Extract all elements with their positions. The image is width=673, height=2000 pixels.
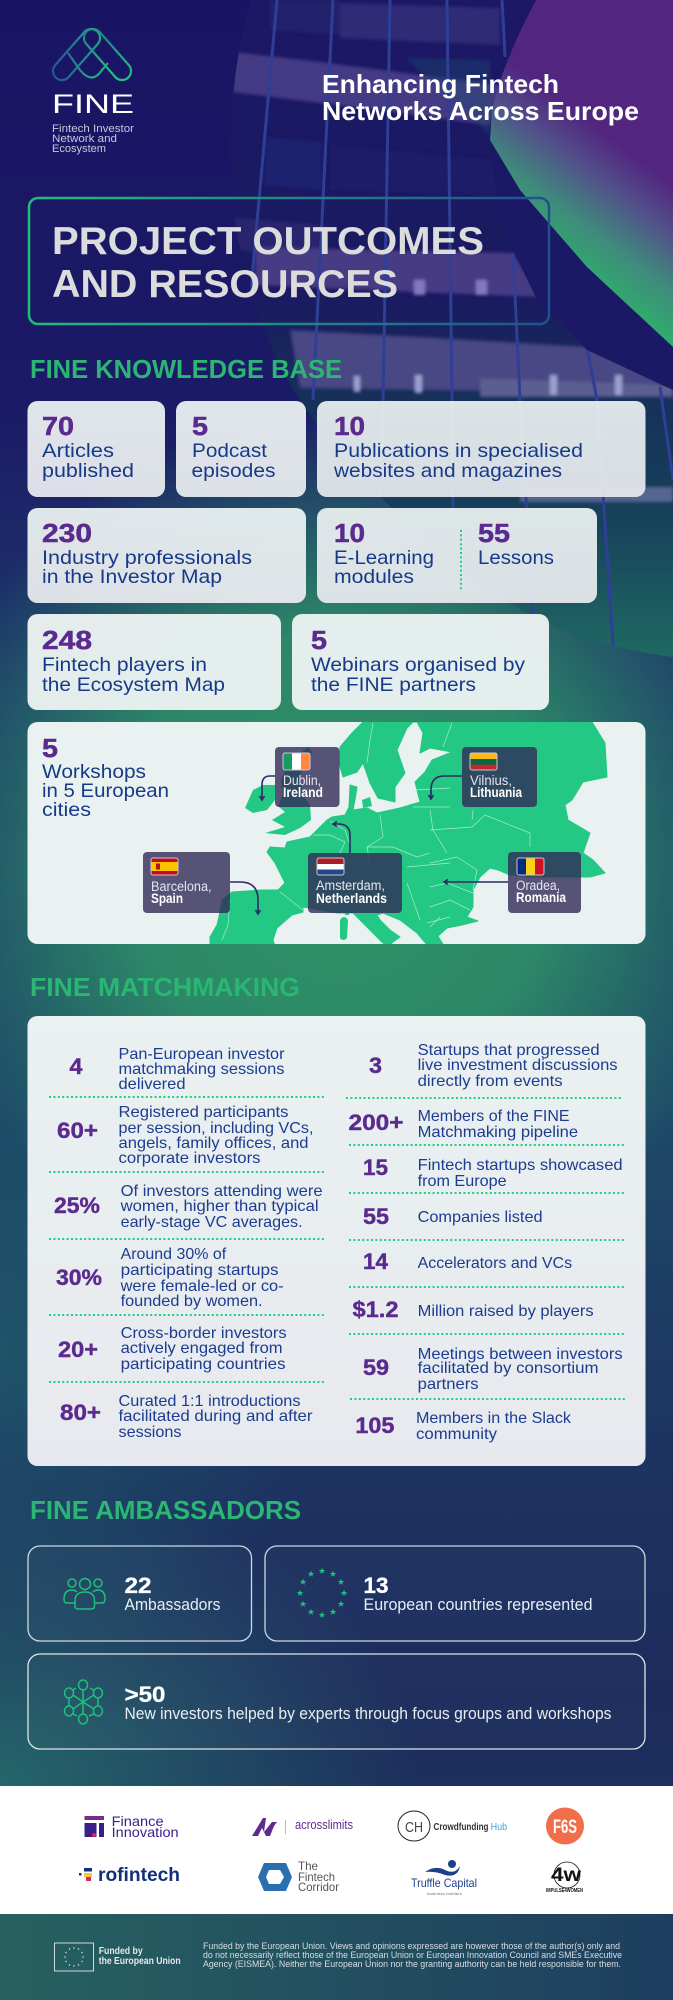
card: articles: [28, 401, 165, 497]
disclaimer: Funded by the European Union. Views and opinions expressed are however those of the author(s) only and: [203, 1941, 620, 1952]
stat: 80+ introductions: 80+: [60, 1400, 101, 1425]
workshops text: in 5 European: [42, 780, 169, 802]
map of Europe: [210, 722, 607, 946]
stat: 25% women: Of investors attending were: [121, 1183, 323, 1200]
workshops text: Workshops: [42, 761, 146, 783]
workshops text: 5: [42, 733, 58, 763]
logo tagline: [52, 123, 134, 155]
stat: 4 sessions: matchmaking sessions: [118, 1061, 285, 1078]
card: investor map: [28, 508, 306, 603]
panel: matchmaking: [28, 1016, 646, 1466]
stat: 3 startups: [369, 1042, 618, 1090]
callout: Dublin, Ireland: Dublin,: [283, 773, 321, 788]
panel: partner logos: [0, 1786, 673, 1914]
card: e-learning: modules: [334, 566, 414, 588]
card: ecosystem map: the Ecosystem Map: [42, 674, 225, 696]
stat: 59 meetings: Meetings between investors: [418, 1346, 623, 1363]
callout: Oradea, Romania: [508, 852, 581, 913]
card: investor map: Industry professionals: [42, 547, 252, 569]
card: e-learning: E-Learning: [334, 547, 434, 569]
card: 13 countries: European countries represented: [364, 1596, 592, 1614]
stat: 4 sessions: delivered: [118, 1076, 186, 1093]
card: webinars: Webinars organised by: [311, 654, 525, 676]
icon: people: [64, 1578, 105, 1609]
stat: 25% women: 25%: [54, 1193, 100, 1218]
logo: rofintech: rofintech: [98, 1865, 180, 1886]
stat: $1.2 million: [352, 1297, 594, 1322]
card: articles: Articles: [42, 440, 114, 462]
card: e-learning: 10: [334, 518, 365, 548]
stat: 3 startups: 3: [369, 1053, 382, 1078]
stat: 80+ introductions: facilitated during and after: [118, 1408, 312, 1425]
card: >50 investors: >50: [124, 1682, 166, 1707]
card: 22 ambassadors: 22: [124, 1573, 152, 1598]
arrow: Vilnius: [428, 776, 462, 799]
stat: 105 slack: [355, 1410, 571, 1443]
stat: 30% startups: 30%: [56, 1265, 102, 1290]
callout: Vilnius, Lithuania: Lithuania: [470, 785, 522, 800]
arrow: Dublin: [260, 776, 275, 800]
card: e-learning: [317, 508, 597, 603]
stat: 20+ cross-border: [58, 1325, 287, 1373]
funded by label: Funded by: [99, 1946, 143, 1957]
callout: Barcelona, Spain: [143, 852, 230, 913]
title text: PROJECT OUTCOMES: [52, 220, 484, 263]
callout: Amsterdam, Netherlands: [308, 853, 402, 913]
stat: 14 accelerators: 14: [363, 1249, 389, 1274]
card: publications: 10: [334, 411, 365, 441]
disclaimer: [203, 1941, 622, 1970]
logo: Truffle Capital: business builders: [427, 1891, 462, 1896]
stat: 15 startups: 15: [363, 1155, 388, 1180]
card: ecosystem map: Fintech players in: [42, 654, 207, 676]
callout: Amsterdam, Netherlands: Netherlands: [316, 891, 387, 906]
logo: acrosslimits: [252, 1817, 353, 1836]
logo: CrowdfundingHub: CH: [405, 1819, 423, 1836]
callout: Oradea, Romania: Romania: [516, 890, 566, 905]
stat: 4 sessions: [70, 1046, 285, 1093]
card: podcast: 5: [192, 411, 208, 441]
card: e-learning: Lessons: [478, 547, 554, 569]
stat: 4 sessions: Pan-European investor: [118, 1046, 284, 1063]
stat: 105 slack: Members in the Slack: [416, 1410, 571, 1427]
workshops text: cities: [42, 799, 91, 821]
logo: Finance Innovation: Finance: [112, 1813, 164, 1829]
logo: The Fintech Corridor: The: [298, 1859, 318, 1873]
arrow: Amsterdam: [333, 822, 350, 853]
header dark wedge: [490, 133, 673, 390]
logo: FINE: [49, 25, 135, 155]
card: articles: 70: [42, 411, 74, 441]
stat: 20+ cross-border: Cross-border investors: [121, 1325, 287, 1342]
stat: 15 startups: from Europe: [418, 1173, 507, 1190]
logo: The Fintech Corridor: [258, 1859, 339, 1894]
logo: The Fintech Corridor: Fintech: [298, 1870, 335, 1884]
stat: 20+ cross-border: participating countries: [121, 1356, 286, 1373]
stat: 20+ cross-border: actively engaged from: [121, 1340, 283, 1357]
card: webinars: [292, 614, 549, 710]
funded by label: the European Union: [99, 1956, 181, 1967]
header subtitle: Enhancing Fintech: [322, 69, 559, 99]
logo: CrowdfundingHub: Crowdfunding: [434, 1822, 488, 1833]
panel: workshops map: [28, 722, 646, 946]
card: investor map: 230: [42, 518, 92, 548]
heading: matchmaking: FINE MATCHMAKING: [30, 972, 300, 1002]
stat: 25% women: women, higher than typical: [120, 1198, 319, 1215]
logo tagline: Ecosystem: [52, 143, 106, 155]
stat: 200+ members: Matchmaking pipeline: [418, 1124, 578, 1141]
stat: 60+ participants: per session, including VCs,: [118, 1120, 314, 1137]
card: publications: [317, 401, 646, 497]
logo: 4W: IMPULSE4WOMEN: [546, 1888, 583, 1894]
callout: Oradea, Romania: Oradea,: [516, 878, 560, 893]
arrow: Oradea: [444, 880, 508, 884]
header photo: building facade: [220, 0, 673, 660]
card: 13 countries: [265, 1546, 645, 1641]
EU flag emblem: [54, 1943, 94, 1971]
logo: acrosslimits: acrosslimits: [295, 1817, 353, 1832]
stat: 30% startups: participating startups: [121, 1262, 279, 1279]
stat: 200+ members: [348, 1108, 578, 1141]
callout: Barcelona, Spain: Spain: [151, 891, 183, 906]
stat: 80+ introductions: sessions: [118, 1424, 182, 1441]
logo: Truffle Capital: Truffle Capital: [411, 1876, 477, 1890]
stat: 105 slack: 105: [355, 1413, 394, 1438]
disclaimer: Agency (EISMEA). Neither the European Union nor the granting authority can be held responsible for them.: [203, 1959, 621, 1970]
stat: 80+ introductions: Curated 1:1 introductions: [118, 1393, 301, 1410]
stat: 30% startups: founded by women.: [121, 1293, 263, 1310]
logo wordmark: FINE: [52, 89, 134, 119]
stat: 59 meetings: partners: [418, 1376, 479, 1393]
stat: 15 startups: Fintech startups showcased: [418, 1157, 623, 1174]
logo: F6S: [546, 1808, 584, 1844]
card: webinars: 5: [311, 625, 327, 655]
logo: 4W: 4w: [551, 1865, 581, 1886]
stat: 60+ participants: angels, family offices, and: [118, 1135, 308, 1152]
heading: ambassadors: FINE AMBASSADORS: [30, 1495, 301, 1525]
disclaimer: do not necessarily reflect those of the European Union or European Innovation Council and SMEs Executive: [203, 1950, 622, 1961]
stat: 55 companies: [363, 1204, 543, 1229]
stat: 3 startups: Startups that progressed: [418, 1042, 600, 1059]
header subtitle: Networks Across Europe: [322, 96, 639, 126]
card: 22 ambassadors: Ambassadors: [124, 1596, 220, 1614]
card: >50 investors: [28, 1654, 645, 1749]
stat: 55 companies: Companies listed: [418, 1209, 543, 1226]
stat: 30% startups: were female-led or co-: [120, 1278, 284, 1295]
card: webinars: the FINE partners: [311, 674, 476, 696]
card: >50 investors: New investors helped by experts through focus groups and workshops: [124, 1705, 612, 1723]
header gradient lens: [490, 0, 673, 347]
stat: 30% startups: Around 30% of: [121, 1246, 227, 1263]
stat: 105 slack: community: [416, 1426, 497, 1443]
icon: EU stars: [297, 1568, 347, 1618]
header subtitle: [322, 69, 639, 126]
stat: 80+ introductions: [60, 1393, 312, 1441]
stat: 59 meetings: [363, 1346, 623, 1393]
logo: CrowdfundingHub: [398, 1811, 507, 1841]
stat: 60+ participants: [57, 1104, 314, 1167]
arrow: Barcelona: [230, 882, 260, 914]
callout: Barcelona, Spain: Barcelona,: [151, 879, 212, 894]
stat: $1.2 million: Million raised by players: [418, 1303, 594, 1320]
title text: [52, 220, 484, 306]
callout: Amsterdam, Netherlands: Amsterdam,: [316, 878, 385, 893]
stat: 4 sessions: 4: [70, 1054, 83, 1079]
callout: Dublin, Ireland: [275, 747, 340, 807]
stat: 200+ members: Members of the FINE: [418, 1108, 570, 1125]
stat: 59 meetings: facilitated by consortium: [418, 1360, 599, 1377]
stat: 200+ members: 200+: [348, 1110, 404, 1135]
card: 22 ambassadors: [28, 1546, 252, 1641]
card: ecosystem map: 248: [42, 625, 92, 655]
logo: Truffle Capital: [411, 1860, 477, 1896]
title text: AND RESOURCES: [52, 263, 398, 306]
workshops text: [42, 733, 169, 821]
callout: Dublin, Ireland: Ireland: [283, 785, 323, 800]
stat: $1.2 million: $1.2: [352, 1297, 398, 1322]
stat: 14 accelerators: Accelerators and VCs: [418, 1255, 572, 1272]
logo tagline: Fintech Investor: [52, 123, 134, 135]
stat: 3 startups: live investment discussions: [418, 1057, 618, 1074]
logo: F6S: F6S: [553, 1817, 577, 1838]
logo: 4W: [546, 1862, 583, 1894]
stat: 20+ cross-border: 20+: [58, 1337, 98, 1362]
title box: [29, 198, 549, 324]
panel: footer: [0, 1914, 673, 2000]
card: podcast: Podcast: [192, 440, 268, 462]
stat: 60+ participants: Registered participants: [118, 1104, 289, 1121]
stat: 25% women: early-stage VC averages.: [121, 1214, 303, 1231]
stat: 30% startups: [56, 1246, 284, 1310]
logo: The Fintech Corridor: Corridor: [298, 1880, 339, 1894]
stat: 60+ participants: corporate investors: [118, 1150, 261, 1167]
stat: 55 companies: 55: [363, 1204, 389, 1229]
stat: 3 startups: directly from events: [418, 1073, 563, 1090]
icon: network: [64, 1680, 102, 1724]
stat: 25% women: [54, 1183, 323, 1231]
stat: 14 accelerators: [363, 1249, 572, 1274]
logo tagline: Network and: [52, 133, 117, 145]
card: investor map: in the Investor Map: [42, 566, 222, 588]
card: ecosystem map: [28, 614, 281, 710]
heading: knowledge base: FINE KNOWLEDGE BASE: [30, 354, 342, 384]
stat: 59 meetings: 59: [363, 1355, 389, 1380]
stat: 15 startups: [363, 1155, 623, 1190]
card: podcast: episodes: [192, 460, 276, 482]
funded by label: [99, 1946, 181, 1967]
logo: CrowdfundingHub: Hub: [491, 1822, 507, 1833]
stat: 60+ participants: 60+: [57, 1118, 98, 1143]
callout: Vilnius, Lithuania: [462, 747, 537, 807]
card: podcast: [176, 401, 306, 497]
card: 13 countries: 13: [364, 1573, 388, 1598]
card: publications: websites and magazines: [333, 460, 562, 482]
card: articles: published: [42, 460, 134, 482]
card: publications: Publications in specialised: [334, 440, 583, 462]
card: e-learning: 55: [478, 518, 510, 548]
logo mark: [49, 25, 135, 84]
logo: Finance Innovation: [84, 1813, 179, 1840]
callout: Vilnius, Lithuania: Vilnius,: [470, 773, 512, 788]
logo: Finance Innovation: Innovation: [112, 1824, 179, 1840]
